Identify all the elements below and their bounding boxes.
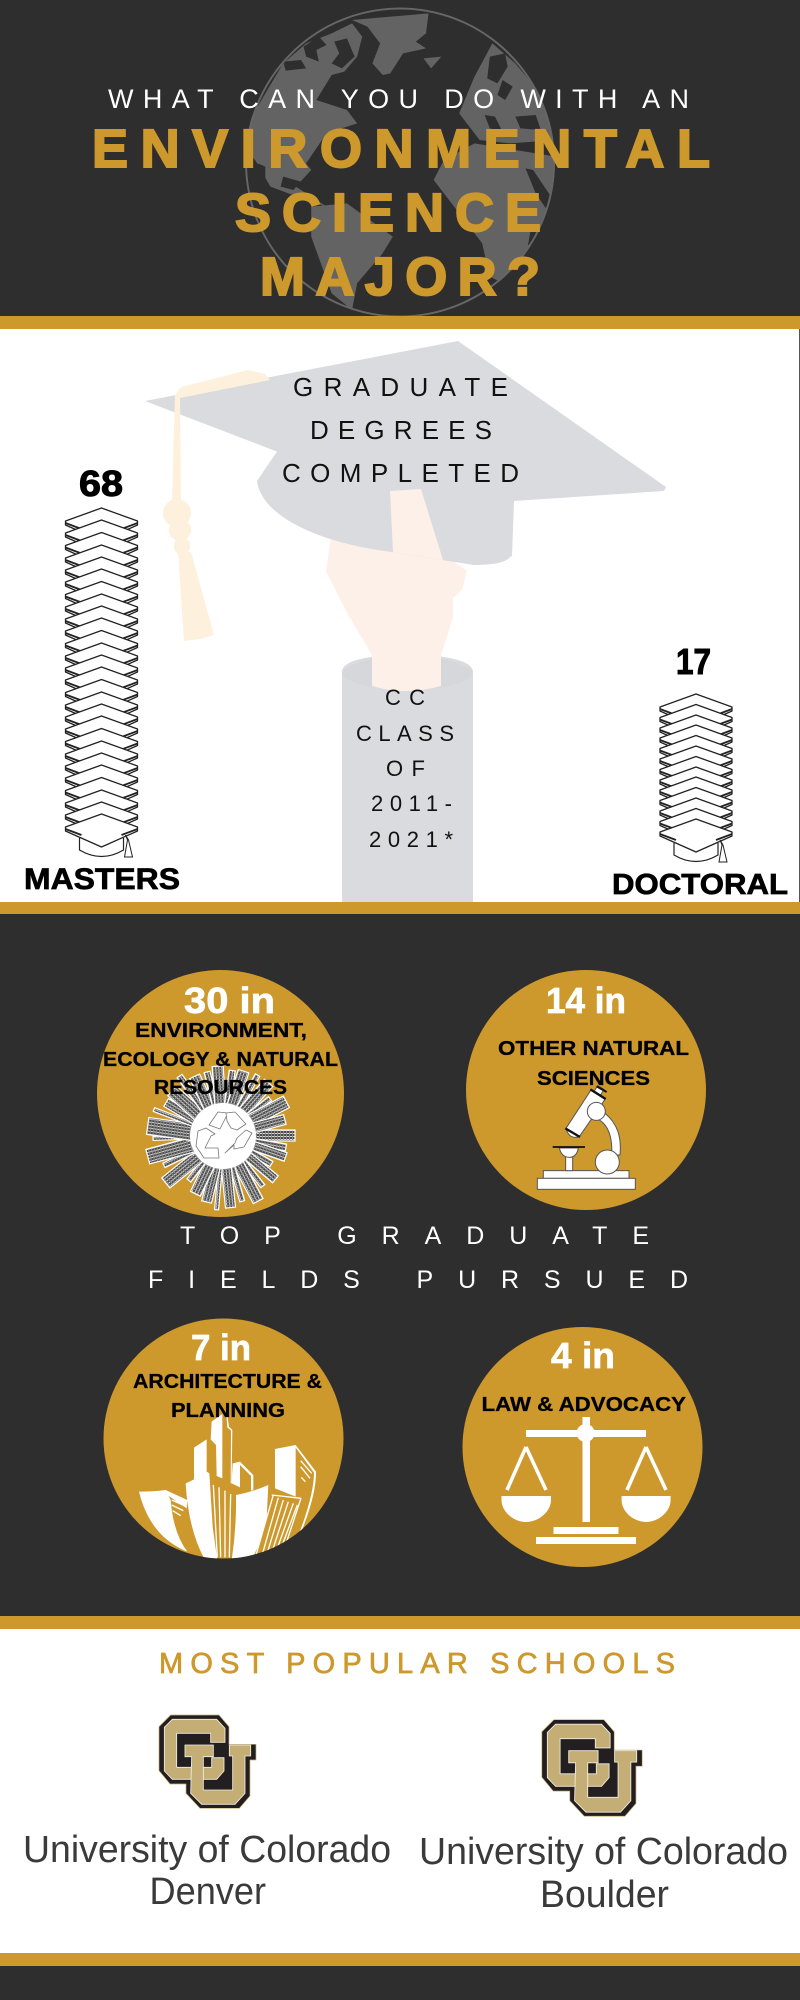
label: masters: MASTERS [24, 863, 180, 896]
label: architecture and planning: ARCHITECTURE & [133, 1370, 322, 1393]
icon: skyscrapers [139, 1414, 316, 1560]
icon: globe [245, 8, 556, 318]
icon: stack of caps doctoral [660, 694, 732, 862]
label: law and advocacy: LAW & ADVOCACY [482, 1393, 686, 1416]
label: architecture and planning [133, 1370, 322, 1422]
text: cc class of 2011-2021: 2011- [371, 791, 452, 816]
label: other natural sciences: SCIENCES [537, 1067, 650, 1090]
text: cc class of 2011-2021: CC [385, 685, 425, 710]
icon: cu logo [159, 1715, 256, 1808]
text: university of colorado boulder [419, 1831, 788, 1916]
heading: top graduate fields pursued: TOP GRADUATE [180, 1222, 649, 1250]
panel: graduate degrees [24, 329, 800, 902]
school: denver [23, 1715, 391, 1913]
divider band [0, 1616, 800, 1629]
title: major: MAJOR? [260, 247, 540, 307]
title: science: SCIENCE [235, 183, 541, 243]
icon: cu logo [542, 1720, 642, 1816]
label: other natural sciences: OTHER NATURAL [498, 1037, 689, 1060]
panel: most popular schools [23, 1648, 788, 1916]
heading: graduate degrees completed: GRADUATE [293, 372, 508, 402]
number: 17 doctoral: 17 [676, 641, 711, 682]
text: university of colorado boulder: University of Colorado [419, 1831, 788, 1873]
panel: top graduate fields [0, 914, 800, 1616]
heading: top graduate fields pursued [148, 1222, 688, 1294]
title line: what can you do with an: WHAT CAN YOU DO WITH AN [108, 84, 689, 114]
number: 68 masters: 68 [79, 463, 123, 504]
circle: 30 in environment [97, 970, 344, 1217]
label: architecture and planning: PLANNING [171, 1399, 285, 1422]
label: doctoral: DOCTORAL [612, 869, 788, 901]
number: 14 in: 14 in [546, 980, 626, 1021]
right edge line [799, 329, 800, 902]
heading: graduate degrees completed: COMPLETED [282, 458, 519, 488]
text: cc class of 2011-2021: 2021* [369, 827, 453, 852]
text: cc class of 2011-2021: OF [386, 756, 425, 781]
label: environment, ecology and natural resources: ECOLOGY & NATURAL [103, 1048, 338, 1071]
label: environment, ecology and natural resources [103, 1019, 338, 1099]
circle: 4 in law and advocacy [462, 1327, 702, 1567]
panel: header [0, 0, 800, 318]
label: environment, ecology and natural resources: ENVIRONMENT, [135, 1019, 307, 1042]
circle: 14 in other natural sciences [466, 970, 706, 1210]
number: 7 in: 7 in [191, 1327, 251, 1368]
icon: graduation cap held by hand [145, 341, 666, 902]
text: university of colorado boulder: Boulder [540, 1874, 669, 1916]
text: university of colorado denver: Denver [150, 1871, 266, 1913]
heading: top graduate fields pursued: FIELDS PURSUED [148, 1266, 688, 1294]
number: 30 in: 30 in [184, 980, 275, 1021]
text: university of colorado denver: University of Colorado [23, 1829, 391, 1871]
text: cc class of 2011-2021 [356, 685, 454, 852]
heading: graduate degrees completed [282, 372, 519, 488]
divider band [0, 902, 800, 914]
text: university of colorado denver [23, 1829, 391, 1913]
divider band [0, 1953, 800, 1966]
school: boulder [419, 1720, 788, 1916]
icon: scales of justice [502, 1417, 671, 1544]
header divider band [0, 316, 800, 329]
icon: microscope [537, 1086, 635, 1189]
icon: stack of caps masters [66, 508, 138, 857]
number: 4 in: 4 in [551, 1335, 615, 1376]
footer panel [0, 1966, 800, 2000]
heading: most popular schools: MOST POPULAR SCHOOLS [159, 1648, 675, 1680]
heading: graduate degrees completed: DEGREES [310, 415, 492, 445]
title: environmental: ENVIRONMENTAL [92, 119, 710, 179]
text: cc class of 2011-2021: CLASS [356, 721, 454, 746]
label: environment, ecology and natural resources: RESOURCES [154, 1076, 287, 1099]
label: other natural sciences [498, 1037, 689, 1090]
circle: 7 in architecture and planning [104, 1318, 344, 1560]
icon: city sunburst with recycling [146, 1066, 295, 1210]
